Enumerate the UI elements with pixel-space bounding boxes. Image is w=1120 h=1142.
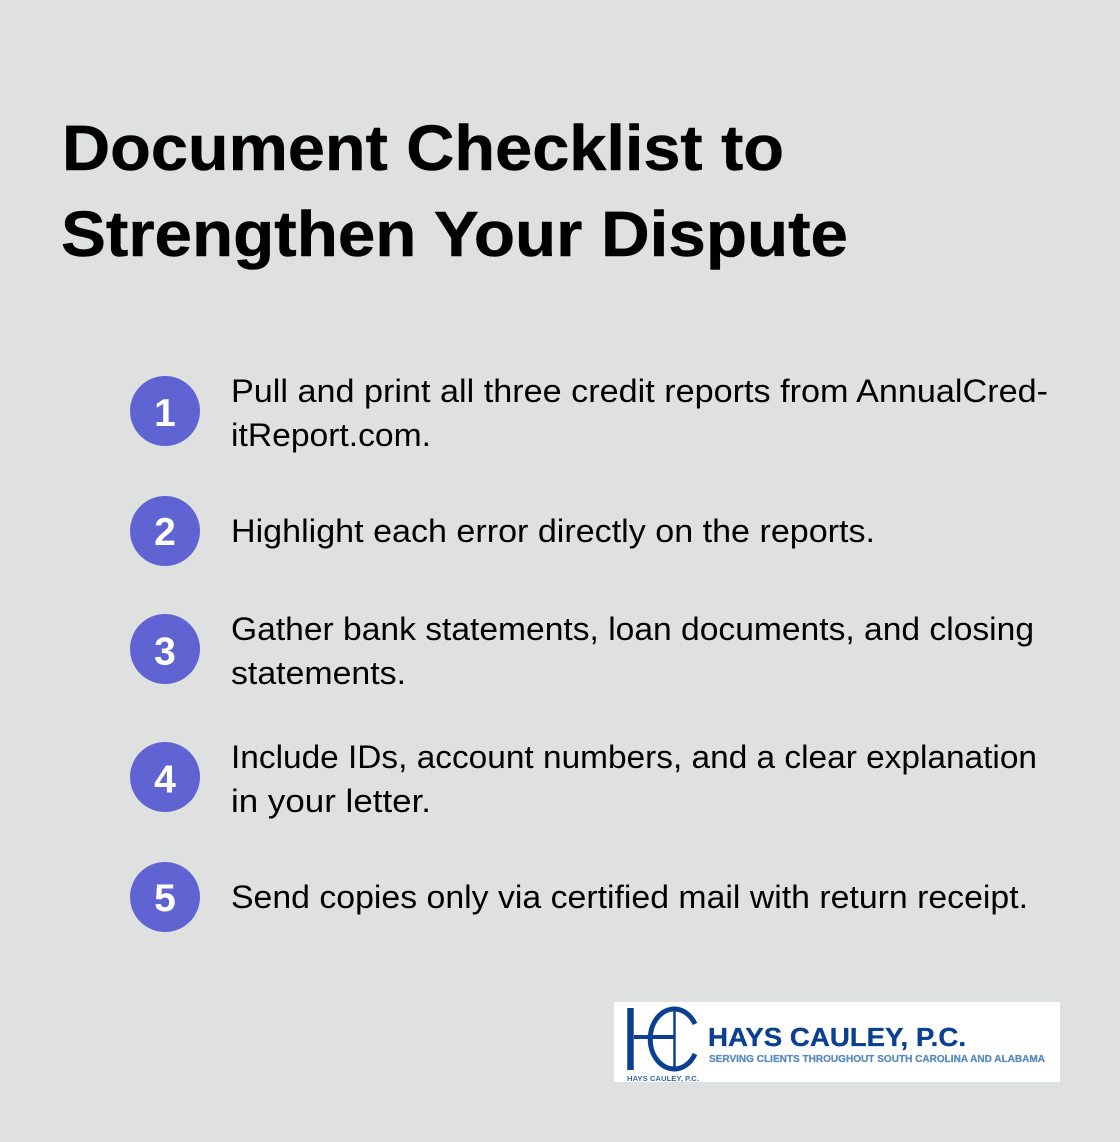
logo: Hays Cauley, P.C.: HAYS CAULEY, P.C. [708, 1022, 966, 1052]
title: Document Checklist to [62, 112, 784, 184]
item 2: Highlight each error directly on the reports. [231, 513, 875, 549]
item 4 [130, 739, 1037, 819]
logo: Hays Cauley, P.C.: SERVING CLIENTS THROUGHOUT SOUTH CAROLINA AND ALABAMA [709, 1053, 1045, 1065]
title: Strengthen Your Dispute [61, 198, 848, 270]
item 3: statements. [231, 655, 406, 691]
item 1: itReport.com. [231, 417, 431, 453]
item 1: Pull and print all three credit reports from AnnualCred- [231, 373, 1048, 409]
item 4: Include IDs, account numbers, and a clear explanation [231, 739, 1037, 775]
item 5: 5 [154, 877, 176, 920]
checklist [130, 373, 1048, 932]
logo: Hays Cauley, P.C. [614, 1002, 1060, 1083]
logo: Hays Cauley, P.C.: HAYS CAULEY, P.C. [627, 1074, 699, 1083]
title [61, 112, 848, 270]
item 1 [130, 373, 1048, 453]
item 5 [130, 862, 1028, 932]
item 3: Gather bank statements, loan documents, and closing [231, 611, 1034, 647]
item 4: 4 [154, 758, 176, 802]
item 1: 1 [154, 392, 176, 435]
item 3 [130, 611, 1034, 691]
item 2: 2 [154, 511, 176, 554]
item 2 [130, 496, 875, 566]
item 5: Send copies only via certified mail with return receipt. [231, 879, 1028, 915]
item 3: 3 [154, 630, 176, 674]
icon: HC monogram [630, 1008, 695, 1070]
item 4: in your letter. [231, 783, 431, 819]
